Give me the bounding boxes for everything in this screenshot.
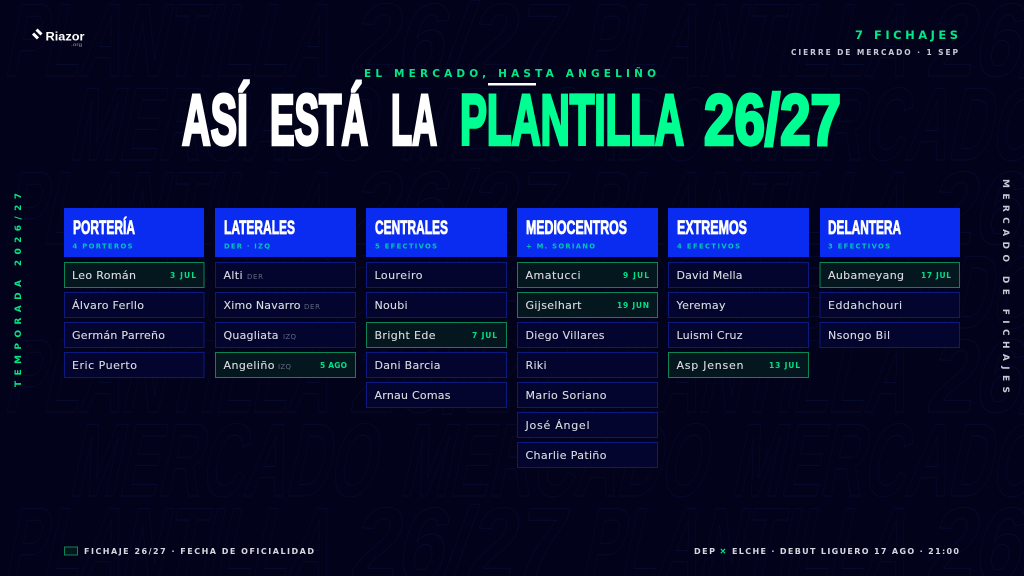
player: Diego Villares: [518, 322, 658, 348]
panel: laterales: [215, 208, 356, 378]
player: Alti: [216, 262, 356, 288]
player: Diego Villares: Diego Villares: [526, 329, 605, 342]
logo: Riazor.org: Riazor: [46, 32, 85, 44]
player: Dani Barcia: [366, 352, 506, 378]
player: Arnau Comas: [366, 382, 506, 408]
background watermark text: 26/27: [343, 151, 578, 267]
panel: extremos: 4 EFECTIVOS: [677, 242, 740, 250]
player: Arnau Comas: Arnau Comas: [374, 389, 451, 402]
player: Angeliño: 5 AGO: [320, 361, 347, 370]
player: Luismi Cruz: [668, 322, 808, 348]
player: Asp Jensen: Asp Jensen: [676, 359, 744, 372]
player: José Ángel: [518, 412, 658, 438]
player: Quagliata: Quagliata: [224, 329, 278, 342]
panel: extremos: EXTREMOS: [677, 218, 747, 239]
legend: FICHAJE 26/27 · FECHA DE OFICIALIDAD: [84, 547, 314, 556]
player: Charlie Patiño: [518, 442, 658, 468]
logo: Riazor.org: [32, 28, 85, 47]
player: Eric Puerto: Eric Puerto: [72, 359, 137, 372]
footer: debut liguero: ELCHE · DEBUT LIGUERO 17 AGO · 21:00: [732, 547, 959, 556]
player: David Mella: [668, 262, 808, 288]
panel: mediocentros: MEDIOCENTROS: [526, 218, 627, 239]
player: Riki: [518, 352, 658, 378]
player: Aubameyang: Aubameyang: [828, 269, 904, 282]
title: ASÍ: [182, 82, 249, 160]
player: Asp Jensen: [668, 352, 808, 378]
panel: centrales: 5 EFECTIVOS: [375, 242, 437, 250]
panel: centrales: [366, 208, 507, 408]
player: Álvaro Ferllo: Álvaro Ferllo: [72, 299, 144, 312]
player: Leo Román: [64, 262, 204, 288]
player: Aubameyang: 17 JUL: [921, 271, 951, 280]
background watermark text: MERCADO: [63, 235, 393, 351]
player: Asp Jensen: 13 JUL: [769, 361, 800, 370]
footer: debut liguero: ×: [720, 546, 726, 558]
player: Noubi: [366, 292, 506, 318]
player: Germán Parreño: Germán Parreño: [72, 329, 165, 342]
player: Loureiro: [366, 262, 506, 288]
player: Alti: Alti: [224, 269, 242, 282]
background watermark text: PLANTILLA: [0, 151, 348, 267]
panel: laterales: DER · IZQ: [224, 242, 270, 250]
background watermark text: MERCADO: [394, 403, 724, 519]
player: Ximo Navarro: DER: [304, 303, 320, 311]
panel: delantera: [820, 208, 960, 348]
player: Gijselhart: [518, 292, 658, 318]
player: Leo Román: Leo Román: [72, 269, 136, 282]
title: ESTÁ: [270, 82, 368, 160]
panel: delantera: 3 EFECTIVOS: [828, 242, 890, 250]
player: Angeliño: [216, 352, 356, 378]
title: PLANTILLA: [460, 82, 684, 160]
player: Quagliata: [216, 322, 356, 348]
player: Charlie Patiño: Charlie Patiño: [526, 449, 607, 462]
kicker: EL MERCADO, HASTA ANGELIÑO: [364, 67, 656, 80]
player: Leo Román: 3 JUL: [170, 271, 196, 280]
player: Amatucci: 9 JUL: [623, 271, 649, 280]
player: Amatucci: [518, 262, 658, 288]
player: Alti: DER: [247, 273, 263, 281]
player: Mario Soriano: Mario Soriano: [526, 389, 607, 402]
player: Germán Parreño: [64, 322, 204, 348]
player: Álvaro Ferllo: [64, 292, 204, 318]
player: Bright Ede: 7 JUL: [472, 331, 497, 340]
player: José Ángel: José Ángel: [524, 419, 590, 432]
title: 26/27: [704, 82, 841, 160]
player: Riki: Riki: [526, 359, 546, 372]
top-right stat: 7 fichajes: 7 FICHAJES: [855, 28, 958, 42]
player: Gijselhart: Gijselhart: [526, 299, 582, 312]
player: Angeliño: Angeliño: [224, 359, 275, 372]
player: Dani Barcia: Dani Barcia: [374, 359, 440, 372]
footer: debut liguero: [694, 546, 959, 558]
panel: laterales: LATERALES: [224, 218, 295, 239]
player: Ximo Navarro: [216, 292, 356, 318]
footer: debut liguero: DEP: [694, 547, 715, 556]
panel: extremos: [668, 208, 809, 378]
background watermark text: MERCADO: [63, 403, 393, 519]
background watermark text: PLANTILLA: [0, 319, 348, 435]
player: Loureiro: Loureiro: [374, 269, 423, 282]
kicker underline: [488, 83, 536, 86]
player: David Mella: David Mella: [676, 269, 742, 282]
player: Bright Ede: Bright Ede: [374, 329, 436, 342]
player: Ximo Navarro: Ximo Navarro: [224, 299, 301, 312]
player: Mario Soriano: [518, 382, 658, 408]
player: Quagliata: IZQ: [283, 333, 296, 341]
panel: delantera: DELANTERA: [828, 218, 901, 239]
background watermark text: MERCADO: [394, 67, 724, 183]
player: Eddahchouri: Eddahchouri: [828, 299, 902, 312]
player: Nsongo Bil: Nsongo Bil: [828, 329, 890, 342]
title: LA: [391, 82, 437, 160]
player: Luismi Cruz: Luismi Cruz: [676, 329, 743, 342]
player: Angeliño: IZQ: [278, 363, 291, 371]
panel: portería: PORTERÍA: [73, 217, 135, 239]
side label: temporada: TEMPORADA 2026/27: [14, 193, 24, 387]
player: Noubi: Noubi: [374, 299, 408, 312]
player: Yeremay: Yeremay: [676, 299, 726, 312]
player: Gijselhart: 19 JUN: [617, 301, 649, 310]
player: Bright Ede: [366, 322, 506, 348]
background watermark text: 26/27: [343, 319, 578, 435]
panel: mediocentros: [517, 208, 658, 468]
background watermark text: MERCADO: [63, 67, 393, 183]
panel: centrales: CENTRALES: [375, 218, 448, 239]
panel: mediocentros: + M. SORIANO: [526, 242, 595, 250]
panel: portería: [64, 208, 204, 378]
title: [182, 82, 841, 160]
player: Yeremay: [668, 292, 808, 318]
top-right stat: 7 fichajes: CIERRE DE MERCADO · 1 SEP: [791, 48, 958, 57]
player: Amatucci: Amatucci: [526, 269, 580, 282]
player: Eric Puerto: [64, 352, 204, 378]
panel: portería: 4 PORTEROS: [72, 242, 133, 250]
player: Aubameyang: [820, 262, 960, 288]
logo: Riazor.org: .org: [71, 42, 83, 47]
top-right stat: 7 fichajes: [791, 28, 958, 57]
side label: mercado de fichajes: MERCADO DE FICHAJES: [1000, 179, 1010, 393]
background watermark text: MERCADO: [394, 235, 724, 351]
